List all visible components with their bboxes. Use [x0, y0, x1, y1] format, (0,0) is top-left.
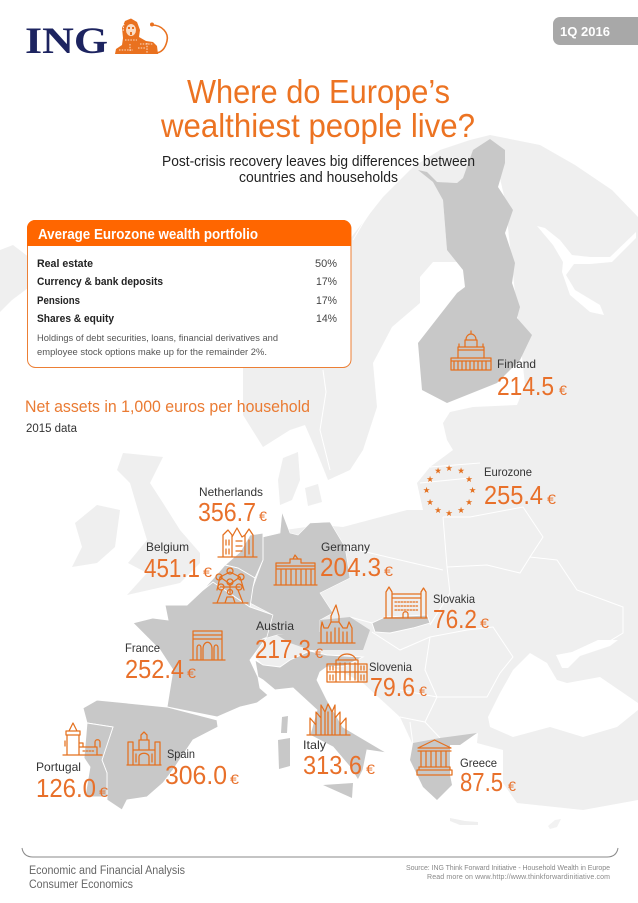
icon: Brandenburg Gate — [274, 555, 317, 585]
map: Austria — [277, 617, 370, 650]
icon: St Stephen's Cathedral — [318, 605, 355, 643]
icon: Belem Tower — [63, 723, 102, 755]
icon: ring of stars: ★ — [426, 474, 434, 484]
Spain: Spain — [167, 747, 195, 761]
France — [125, 631, 225, 684]
portfolio rows: 14% — [316, 313, 337, 325]
map: Greece — [410, 733, 477, 800]
Austria: Austria — [256, 619, 294, 633]
Eurozone — [423, 463, 556, 518]
map: Spain — [83, 700, 218, 810]
Italy: € — [366, 761, 375, 777]
Greece: Greece — [460, 756, 497, 770]
logo wordmark: ING — [25, 21, 108, 62]
France: € — [187, 665, 196, 681]
map: White Sea — [537, 226, 636, 315]
Finland: 214.5 — [497, 373, 554, 401]
title: Where do Europe’s — [187, 73, 450, 110]
Eurozone: 255.4 — [484, 482, 543, 510]
portfolio rows: Currency & bank deposits — [37, 276, 163, 288]
subtitle: Post-crisis recovery leaves big differences between — [162, 154, 475, 170]
icon: Helsinki cathedral — [451, 331, 491, 370]
map: Belgium and Luxembourg — [203, 565, 255, 607]
footer department — [29, 865, 185, 891]
map: Scandinavia — [243, 135, 505, 480]
map: Iceland — [0, 245, 32, 312]
portfolio rows: 17% — [316, 276, 337, 288]
Belgium: 451.1 — [144, 555, 200, 583]
Greece: 87.5 — [460, 769, 503, 797]
icon: Arc de Triomphe — [190, 631, 225, 660]
icon: Spanish palace — [127, 732, 161, 765]
icon: ring of stars — [423, 463, 477, 518]
subtitle — [162, 154, 475, 186]
footer source: Source: ING Think Forward Initiative - Household Wealth in Europe — [406, 865, 610, 872]
Portugal: Portugal — [36, 760, 81, 774]
map: Portugal — [84, 723, 113, 797]
Belgium: € — [203, 564, 212, 580]
icon: ring of stars: ★ — [457, 505, 465, 515]
icon: ring of stars: ★ — [465, 474, 473, 484]
chart heading: Net assets in 1,000 euros per household — [25, 397, 310, 416]
portfolio note — [37, 333, 278, 358]
icon: Dutch canal houses — [218, 528, 257, 557]
icon: ring of stars: ★ — [423, 485, 431, 495]
map: Sicily — [323, 783, 353, 798]
Belgium — [144, 540, 248, 603]
icon: ring of stars: ★ — [426, 497, 434, 507]
footer department: Economic and Financial Analysis — [29, 865, 185, 877]
Finland: € — [559, 382, 567, 398]
panel heading: Average Eurozone wealth portfolio — [38, 227, 258, 243]
Germany: Germany — [321, 540, 370, 554]
quarter badge — [553, 17, 638, 45]
subtitle: countries and households — [239, 170, 398, 186]
Germany: € — [384, 563, 393, 579]
Netherlands: € — [259, 508, 267, 524]
panel: average Eurozone wealth portfolio — [27, 220, 351, 368]
Germany: 204.3 — [320, 554, 381, 582]
Portugal — [36, 723, 108, 803]
Belgium: Belgium — [146, 540, 189, 554]
France: 252.4 — [125, 656, 184, 684]
Italy: 313.6 — [303, 752, 362, 780]
icon: Parthenon — [417, 740, 452, 775]
icon: Milan Cathedral — [307, 704, 350, 735]
Spain: € — [230, 771, 239, 787]
map: Corsica — [281, 716, 288, 733]
portfolio rows: 50% — [315, 258, 337, 270]
map: Sardinia — [278, 738, 290, 769]
portfolio rows: 17% — [316, 295, 337, 307]
icon: ring of stars: ★ — [445, 508, 453, 518]
Portugal: € — [99, 784, 108, 800]
map: Italy and Slovenia — [255, 651, 387, 780]
portfolio rows: Shares & equity — [37, 313, 115, 325]
data year: 2015 data — [26, 423, 78, 435]
map: Denmark — [278, 452, 300, 505]
Germany — [274, 540, 393, 585]
footer source: Read more on www.http://www.thinkforwardinitiative.com — [427, 874, 610, 881]
portfolio note: employee stock options make up for the remainder 2%. — [37, 347, 267, 358]
map: Switzerland — [255, 635, 310, 667]
portfolio rows — [37, 258, 337, 325]
map: Crete — [450, 818, 478, 825]
title: wealthiest people live? — [160, 107, 475, 144]
Finland: Finland — [497, 357, 536, 371]
France: France — [125, 641, 160, 655]
map: Cyprus — [548, 819, 561, 829]
Austria: € — [315, 645, 323, 661]
Slovenia: 79.6 — [370, 674, 415, 702]
map: Danish islands — [305, 484, 322, 506]
quarter badge: 1Q 2016 — [560, 24, 610, 39]
Spain — [127, 732, 239, 790]
portfolio rows: Pensions — [37, 295, 80, 307]
map: Germany — [250, 512, 350, 640]
map: Netherlands — [225, 533, 263, 578]
map: borders in eastern Europe — [320, 193, 623, 745]
icon: ring of stars: ★ — [445, 463, 453, 473]
icon: ring of stars: ★ — [469, 485, 477, 495]
portfolio rows: Real estate — [37, 258, 93, 270]
Austria: 217.3 — [255, 636, 311, 664]
Greece: € — [508, 778, 516, 794]
Austria — [255, 605, 355, 664]
Slovenia: € — [419, 683, 427, 699]
icon: ring of stars: ★ — [465, 497, 473, 507]
Slovakia — [384, 587, 489, 634]
Italy — [303, 704, 375, 780]
map: Sea of Azov — [556, 640, 618, 668]
Netherlands — [198, 485, 267, 557]
icon: Bratislava Castle — [384, 587, 427, 618]
map: eastern Europe and Russia — [250, 135, 638, 810]
map: Slovakia — [372, 615, 430, 633]
map: France — [133, 582, 273, 717]
Slovakia: € — [480, 615, 489, 631]
Slovakia: Slovakia — [433, 592, 475, 606]
panel header — [27, 220, 351, 246]
icon: ring of stars: ★ — [457, 466, 465, 476]
icon: ring of stars: ★ — [434, 505, 442, 515]
background map of Europe — [0, 135, 638, 829]
title — [160, 73, 475, 144]
map: Ireland — [72, 505, 120, 567]
Netherlands: Netherlands — [199, 485, 263, 499]
ING logo — [25, 18, 167, 62]
Slovenia: Slovenia — [369, 660, 412, 674]
icon: Atomium — [213, 568, 248, 603]
map: Finland — [418, 139, 532, 403]
footer department: Consumer Economics — [29, 879, 133, 891]
Greece — [417, 740, 516, 797]
footer rule — [22, 848, 618, 857]
Eurozone: Eurozone — [484, 465, 532, 479]
portfolio note: Holdings of debt securities, loans, financial derivatives and — [37, 333, 278, 344]
Eurozone: € — [547, 491, 556, 507]
logo lion — [115, 18, 167, 54]
icon: Ljubljana building — [327, 654, 367, 682]
icon: ring of stars: ★ — [434, 466, 442, 476]
footer source — [406, 865, 610, 881]
map: Black Sea and inland waters — [488, 653, 638, 737]
Slovenia — [327, 654, 427, 702]
Slovakia: 76.2 — [433, 606, 477, 634]
Finland — [451, 331, 567, 401]
Spain: 306.0 — [165, 762, 227, 790]
map: Great Britain — [117, 453, 200, 595]
Italy: Italy — [303, 738, 326, 752]
Netherlands: 356.7 — [198, 499, 256, 527]
Portugal: 126.0 — [36, 775, 96, 803]
